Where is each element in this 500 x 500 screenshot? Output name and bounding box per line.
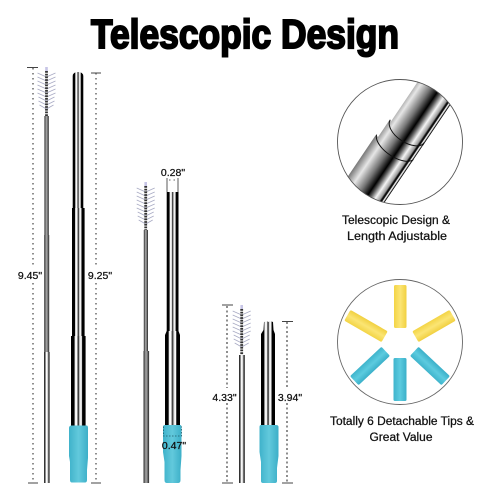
icon: blue tip right xyxy=(410,347,450,385)
medium straw xyxy=(163,192,182,483)
dimension: tall brush 9.45 xyxy=(18,68,42,483)
teal tip xyxy=(260,425,278,483)
dimension: tall straw 9.25: 9.25" xyxy=(88,270,112,282)
icon: blue tip left xyxy=(350,347,390,385)
dimension: small brush 4.33: 4.33" xyxy=(212,392,237,404)
dimension: 0.28 inch diameter: 0.28" xyxy=(161,167,185,179)
caption: telescopic design: Telescopic Design & xyxy=(342,215,450,227)
title: Telescopic Design xyxy=(91,11,399,57)
caption: telescopic design xyxy=(342,215,450,243)
caption: detachable tips: Totally 6 Detachable Tips & xyxy=(330,416,474,428)
tall brush xyxy=(38,67,56,483)
dimension: tall brush 9.45: 9.45" xyxy=(18,270,42,282)
caption: telescopic design: Length Adjustable xyxy=(347,231,447,243)
icon: yellow tip right xyxy=(412,310,456,342)
icon: yellow tip top xyxy=(394,285,406,328)
dimension: 0.28 inch diameter xyxy=(161,167,185,192)
icon: yellow tip left xyxy=(344,310,388,342)
dimension: tall straw 9.25 xyxy=(88,73,112,483)
dimension: small straw 3.94 xyxy=(278,322,302,483)
small brush xyxy=(233,305,251,483)
caption: detachable tips: Great Value xyxy=(370,432,432,444)
dimension: 0.47 inch tip xyxy=(162,426,186,452)
medium brush xyxy=(137,182,155,483)
icon: magnified tube joint xyxy=(348,82,450,202)
icon: blue tip bottom xyxy=(394,358,406,401)
caption: detachable tips xyxy=(330,416,474,444)
dimension: small brush 4.33 xyxy=(212,305,237,483)
tall straw xyxy=(69,72,88,482)
dimension: 0.47 inch tip: 0.47" xyxy=(162,440,186,452)
dimension: small straw 3.94: 3.94" xyxy=(278,392,302,404)
panel: telescopic detail xyxy=(337,79,463,205)
panel: detachable tips xyxy=(338,280,462,404)
small straw xyxy=(260,321,278,483)
teal tip xyxy=(69,426,88,482)
teal tip xyxy=(163,425,182,483)
